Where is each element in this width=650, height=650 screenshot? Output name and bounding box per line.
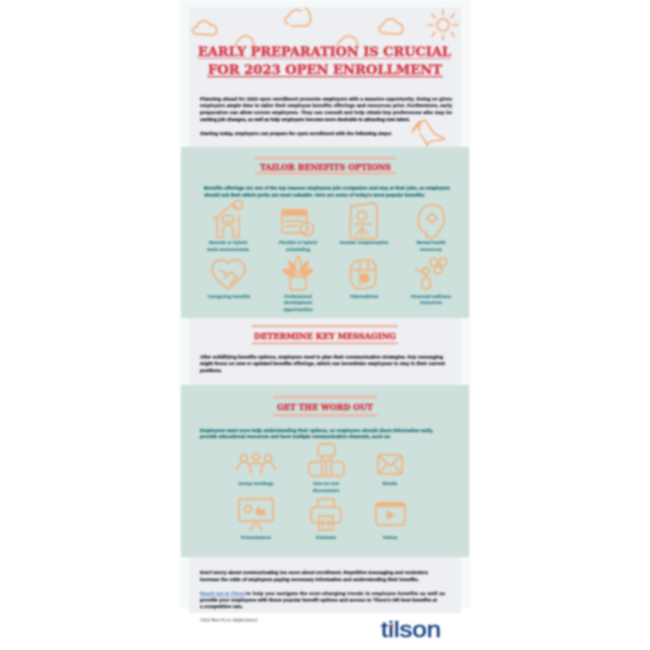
- label: flexible scheduling: Flexible or hybrid: [279, 240, 317, 245]
- label: financial wellness: Financial wellness: [411, 294, 452, 299]
- label: financial wellness: [411, 294, 452, 305]
- icon: remote work home: [214, 200, 242, 237]
- decorative header icons: [193, 8, 458, 146]
- text: messaging: positions.: [200, 368, 222, 374]
- closing text: Don't worry about communicating too soon about enrollment. Repetitive messaging and reminders: [200, 570, 428, 576]
- label: development: opportunities: [283, 307, 313, 312]
- label: remote work: Remote or hybrid: [209, 240, 247, 245]
- icon: financial wellness: [415, 258, 447, 289]
- label: one-on-one: discussions: [313, 488, 340, 493]
- label: one-on-one: One-on-one: [313, 481, 339, 486]
- label: compensation: Greater compensation: [340, 240, 389, 245]
- heading: get the word out: [273, 396, 377, 416]
- intro text: benefits: Benefits offerings are one of the top reasons employees join companies and stay at their jobs, so employers: [204, 186, 450, 192]
- text: messaging: After solidifying benefits options, employers need to plan their communication strategies. Key messaging: [200, 354, 443, 360]
- label: telemedicine: Telemedicine: [350, 294, 379, 299]
- heading: tailor benefits options: TAILOR BENEFITS OPTIONS: [260, 162, 391, 172]
- label: presentations: Presentations: [241, 535, 272, 540]
- label: flexible scheduling: [279, 240, 317, 252]
- intro text: seeking job changes, as well as help employers become more desirable in attracting new talent.: [200, 117, 410, 123]
- label: mental health: [416, 240, 446, 252]
- text: messaging: [200, 354, 445, 374]
- closing text: provide your employees with those popular benefit options and access to Tilson's HR best benefits at: [200, 598, 437, 604]
- heading: determine key messaging: DETERMINE KEY MESSAGING: [254, 331, 396, 341]
- label: printouts: Printouts: [316, 535, 337, 540]
- logo: tilson: tilson: [381, 617, 441, 642]
- icon: printer: [311, 499, 341, 530]
- label: caregiving: Caregiving benefits: [208, 294, 251, 299]
- heading: get the word out: GET THE WORD OUT: [277, 402, 374, 412]
- icon: mental health head: [418, 205, 444, 238]
- icon: caregiving heart: [212, 260, 245, 289]
- title: EARLY PREPARATION IS CRUCIAL: [198, 45, 451, 60]
- label: development: [283, 294, 313, 312]
- title: FOR 2023 OPEN ENROLLMENT: [208, 63, 442, 78]
- icon: video player: [376, 503, 405, 525]
- intro text: Planning ahead for 2023 open enrollment presents employers with a massive opportunity. Doing so gives: [200, 96, 452, 102]
- panel: get the word out: [181, 385, 469, 557]
- label: one-on-one: [313, 481, 340, 493]
- label: flexible scheduling: scheduling: [286, 247, 310, 252]
- text: word out: provide educational resources and have multiple communication channels, such as:: [200, 434, 391, 440]
- intro text: benefits: should ask their which perks are most valuable. Here are some of today's most popular benefits:: [204, 192, 425, 198]
- label: financial wellness: resources: [420, 300, 442, 305]
- closing text: a competitive rate.: [200, 604, 243, 610]
- title: [198, 45, 451, 78]
- panel: tailor benefits options: [181, 147, 469, 318]
- closing text: to help you navigate the ever-changing trends in employee benefits as well as: [246, 591, 445, 597]
- footnote: ©2023 Tilson HR, Inc. All rights reserved.: [200, 618, 258, 622]
- icon: greater compensation: [350, 203, 377, 239]
- icon: group meetings: [237, 454, 275, 473]
- text: messaging: might focus on new or updated benefits offerings, which can incentivize employees to stay in their current: [200, 361, 445, 367]
- label: development: development: [284, 300, 313, 305]
- label: group meetings: Group meetings: [238, 481, 274, 486]
- label: mental health: Mental health: [416, 240, 446, 245]
- icon: telemedicine: [350, 260, 376, 289]
- intro text: Starting today, employers can prepare for open enrollment with the following steps:: [200, 131, 392, 137]
- icon: one-on-one discussions: [309, 444, 344, 476]
- closing text: increase the odds of employees paying necessary information and understanding their benefits.: [200, 577, 419, 583]
- icon: plant development: [282, 256, 314, 290]
- label: emails: Emails: [383, 481, 398, 486]
- label: development: Professional: [284, 294, 312, 299]
- closing text: [200, 570, 445, 610]
- intro text: [200, 96, 452, 137]
- icon: presentation board: [239, 499, 273, 530]
- icon: calendar clock: [282, 210, 314, 236]
- text: word out: Employees want more help understanding their options, so employers should share information early,: [200, 428, 434, 434]
- text: word out: [200, 428, 434, 440]
- label: videos: Videos: [383, 535, 398, 540]
- closing text: Reach out to Tilson: [200, 591, 245, 597]
- intro text: employers ample time to tailor their employee benefits offerings and resources prior. Furthermore, early: [200, 103, 452, 109]
- label: remote work: work environments: [206, 247, 250, 252]
- icon: emails envelope: [378, 455, 402, 474]
- intro text: preparation can allow screen employees. They can consult and help obtain key preferences who may be: [200, 110, 452, 116]
- label: mental health: resources: [420, 247, 442, 252]
- intro text: benefits: [204, 186, 450, 198]
- label: remote work: [206, 240, 250, 252]
